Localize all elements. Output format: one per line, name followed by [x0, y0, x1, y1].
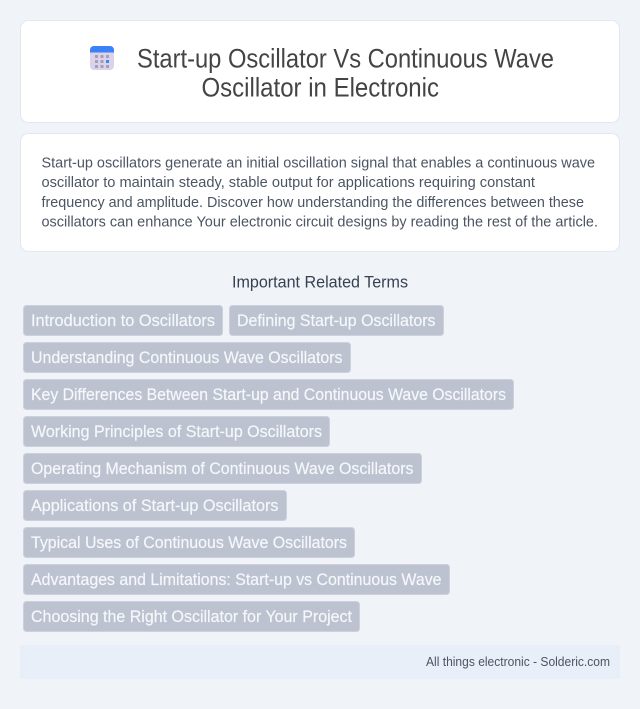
tag: Applications of Start-up Oscillators	[31, 496, 278, 515]
panel: title card	[20, 20, 620, 122]
tag	[230, 306, 444, 336]
title: Start-up Oscillator Vs Continuous Wave	[137, 44, 554, 74]
tag: Defining Start-up Oscillators	[237, 311, 436, 330]
intro paragraph: oscillator to maintain steady, stable output for applications requiring constant	[42, 174, 536, 191]
tag	[24, 416, 330, 446]
tag: Introduction to Oscillators	[31, 311, 215, 330]
intro paragraph	[42, 154, 598, 230]
footer: All things electronic - Solderic.com	[426, 654, 610, 669]
tag: Working Principles of Start-up Oscillators	[31, 422, 322, 441]
tag: Choosing the Right Oscillator for Your Project	[31, 607, 352, 626]
tag: Typical Uses of Continuous Wave Oscillators	[31, 533, 347, 552]
tag	[24, 454, 422, 484]
tag	[24, 490, 286, 520]
panel: intro text card	[20, 134, 620, 252]
tag	[24, 342, 350, 372]
tag	[24, 564, 450, 594]
tag	[24, 306, 222, 336]
tag	[24, 602, 360, 632]
intro paragraph: frequency and amplitude. Discover how understanding the differences between these	[42, 194, 584, 211]
tag	[24, 380, 514, 410]
heading: important related terms: Important Related Terms	[232, 272, 408, 292]
tag: Understanding Continuous Wave Oscillators	[31, 348, 342, 367]
tag	[24, 528, 354, 558]
intro paragraph: oscillators can enhance Your electronic circuit designs by reading the rest of the article.	[42, 214, 598, 230]
panel: related term tags	[24, 306, 514, 632]
icon: calendar	[90, 46, 114, 70]
title	[137, 44, 554, 102]
title: Oscillator in Electronic	[202, 72, 439, 102]
tag: Advantages and Limitations: Start-up vs Continuous Wave	[31, 570, 442, 589]
footer	[20, 645, 620, 679]
tag: Operating Mechanism of Continuous Wave Oscillators	[31, 459, 414, 478]
intro paragraph: Start-up oscillators generate an initial oscillation signal that enables a continuous wave	[42, 154, 595, 172]
tag: Key Differences Between Start-up and Continuous Wave Oscillators	[31, 385, 506, 404]
